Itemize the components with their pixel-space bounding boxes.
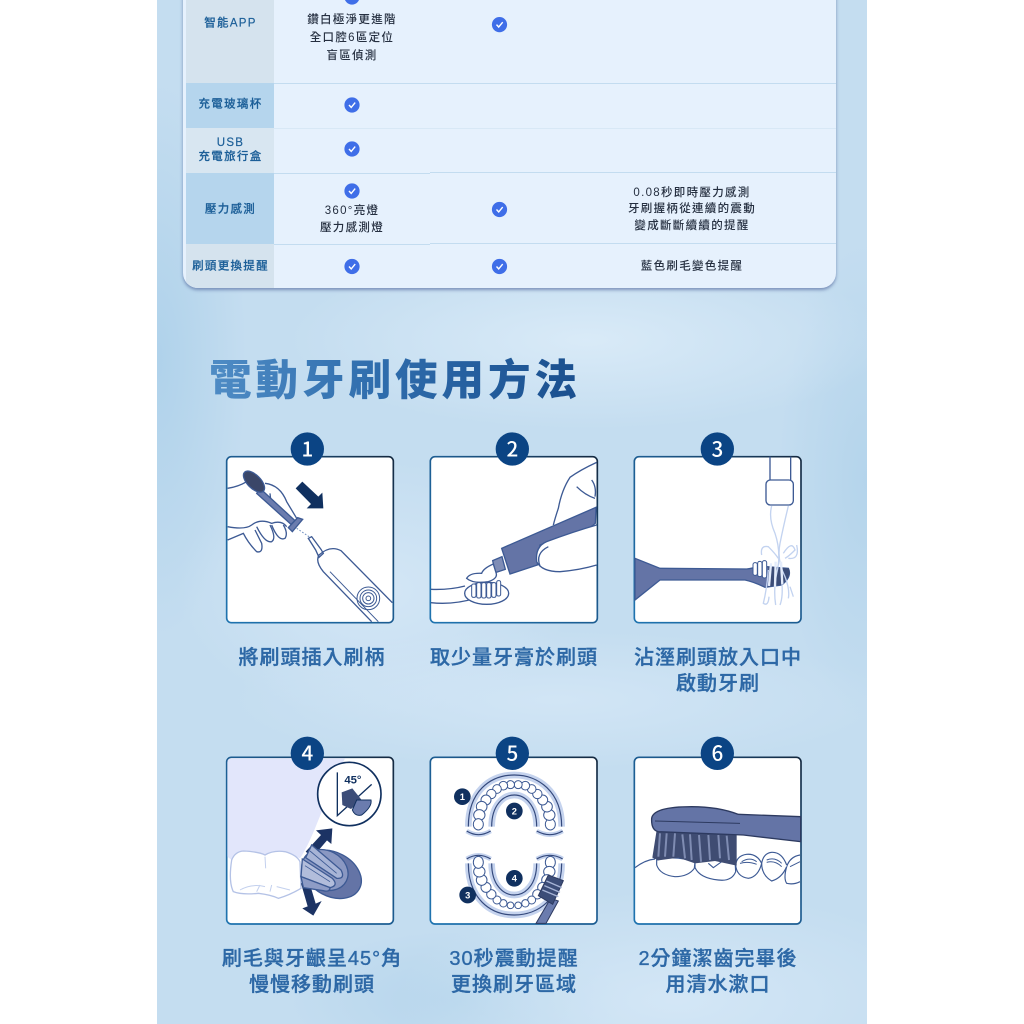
- row label: pressure sensing: 壓力感測: [205, 203, 256, 215]
- step 2 caption: 取少量牙膏於刷頭: [430, 647, 598, 669]
- pressure light description: 360°亮燈: [325, 204, 379, 216]
- panel background: [157, 0, 867, 1024]
- badge 2: 2: [506, 432, 518, 462]
- icon: brush handle: [308, 537, 392, 622]
- row label: charging glass: 充電玻璃杯: [198, 98, 262, 110]
- icon: bristles: [652, 830, 737, 866]
- icon: lower teeth: [473, 856, 555, 909]
- icon: toothbrush with paste: [431, 564, 509, 604]
- step 3 caption: [634, 646, 802, 695]
- pressure light description: [320, 204, 384, 234]
- row label: USB travel case: USB: [217, 136, 244, 148]
- icon: zone numbers: 2: [512, 806, 517, 816]
- tile frame: [227, 757, 393, 924]
- step 5 caption: 30秒震動提醒: [449, 948, 579, 970]
- icon: zone bands: [467, 775, 563, 915]
- step 5 caption: 更換刷牙區域: [451, 974, 577, 996]
- badge 4: 4: [301, 737, 313, 767]
- badge 6: 6: [711, 737, 723, 767]
- smart app description: 全口腔6區定位: [310, 32, 394, 44]
- smart app description: 盲區偵測: [326, 50, 378, 62]
- title: 電動牙刷使用方法: [209, 358, 581, 405]
- icon: faucet: [766, 457, 793, 505]
- step 3 caption: 沾溼刷頭放入口中: [634, 647, 802, 669]
- icon: brush head: [635, 558, 790, 600]
- icon: zone numbers: [454, 788, 523, 903]
- pressure sensing description: 牙刷握柄從連續的震動: [628, 203, 756, 215]
- brush head reminder description: 藍色刷毛變色提醒: [641, 260, 743, 272]
- step 5 illustration: [430, 736, 598, 925]
- smart app description: 鑽白極淨更進階: [307, 14, 397, 26]
- step 3 illustration: [634, 432, 802, 624]
- icon: upper hand: [553, 462, 597, 525]
- badge 5: [496, 737, 529, 770]
- step 4 illustration: [226, 736, 394, 925]
- badge 4: [291, 737, 324, 770]
- pressure light description: 壓力感測燈: [320, 222, 384, 234]
- row label: smart app: 智能APP: [204, 17, 257, 29]
- step 5 caption: [449, 948, 579, 996]
- tile frame: [634, 757, 801, 924]
- step 2 illustration: [430, 432, 598, 624]
- step 1 illustration: [226, 432, 394, 624]
- badge 3: [701, 432, 734, 466]
- tile frame: [430, 757, 597, 924]
- icon: small toothbrush: [536, 875, 563, 923]
- icon: brush highlight line: [655, 821, 740, 823]
- icon: teeth: [635, 852, 800, 884]
- badge 1: 1: [301, 432, 313, 462]
- badge 5: 5: [506, 737, 518, 767]
- icon: gum area: [227, 758, 345, 860]
- comparison table card: [183, 0, 836, 288]
- step 4 caption: 刷毛與牙齦呈45°角: [222, 948, 402, 970]
- icon: brush body: [652, 807, 801, 842]
- icon: tooth: [230, 851, 301, 898]
- step 6 illustration: [634, 736, 802, 925]
- icon: toothpaste tube: [493, 507, 597, 574]
- icon: brush head on tooth: [295, 841, 370, 908]
- pressure sensing description: [628, 186, 756, 232]
- icon: zone numbers: 3: [465, 890, 470, 900]
- row label: USB travel case: 充電旅行盒: [198, 150, 262, 162]
- icon: zone numbers: 1: [460, 792, 465, 802]
- table check marks: [344, 0, 508, 274]
- badge 3: 3: [711, 432, 723, 462]
- tile frame: [227, 457, 393, 623]
- step 6 caption: 用清水漱口: [666, 974, 770, 996]
- icon: dotted guide: [297, 528, 310, 537]
- step 6 caption: [638, 948, 798, 996]
- row label: USB travel case: [198, 136, 262, 162]
- icon: upper teeth: [473, 781, 555, 830]
- pressure sensing description: 變成斷斷續續的提醒: [634, 220, 750, 232]
- tile frame: [430, 457, 597, 623]
- step 6 caption: 2分鐘潔齒完畢後: [638, 948, 798, 970]
- row label: brush head reminder: 刷頭更換提醒: [192, 260, 269, 272]
- icon: hand and brush head: [228, 468, 303, 552]
- icon: running water: [761, 506, 797, 605]
- tile frame: [634, 457, 801, 623]
- pressure sensing description: 0.08秒即時壓力感測: [633, 186, 751, 198]
- icon: 45 degree inset: 45°: [344, 774, 362, 786]
- step 4 caption: 慢慢移動刷頭: [249, 974, 375, 996]
- smart app description: [307, 13, 397, 62]
- icon: 45 degree inset: [318, 762, 381, 826]
- badge 1: [291, 432, 324, 466]
- step 4 caption: [222, 948, 402, 996]
- icon: zone numbers: 4: [512, 874, 518, 884]
- step 1 caption: 將刷頭插入刷柄: [238, 647, 386, 669]
- step 3 caption: 啟動牙刷: [676, 673, 760, 695]
- icon: insertion arrow: [296, 482, 323, 508]
- badge 6: [701, 737, 734, 770]
- icon: movement arrows: [301, 828, 332, 916]
- badge 2: [496, 432, 529, 466]
